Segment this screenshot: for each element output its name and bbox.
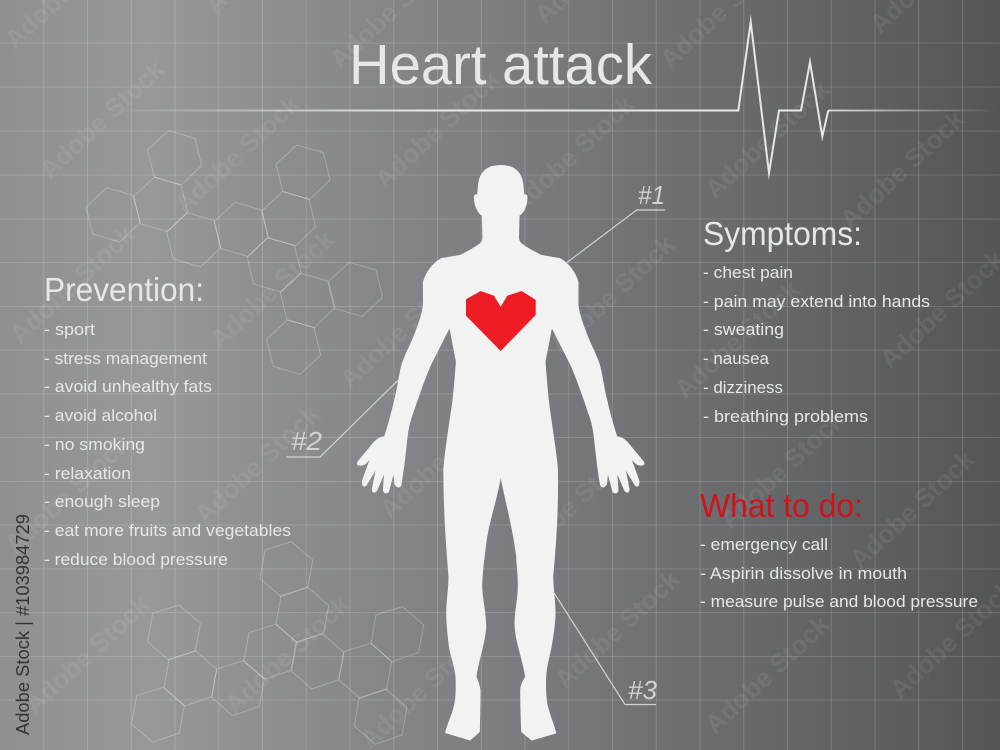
symptoms list: - chest pain [703,263,793,282]
stock watermark layer: Adobe Stock [204,224,341,354]
what to do heading: What to do: [700,487,863,524]
stock watermark layer: Adobe Stock [4,219,141,349]
red heart [466,291,536,351]
prevention list: - sport [44,320,95,339]
stock watermark layer: Adobe Stock [549,564,686,694]
ECG heartbeat line [100,22,995,173]
side stock credit: Adobe Stock | #103984729 [13,514,33,735]
stock watermark layer: Adobe Stock [369,64,506,194]
panel: symptoms [703,215,930,426]
stock watermark layer: Adobe Stock [169,89,306,219]
what to do list: - measure pulse and blood pressure [700,592,978,611]
stock watermark layer: Adobe Stock [669,274,806,404]
stock watermark layer: Adobe Stock [189,399,326,529]
symptoms heading: Symptoms: [703,215,862,252]
body silhouette with heart [357,166,644,740]
stock watermark layer: Adobe Stock [374,394,511,524]
prevention heading: Prevention: [44,271,204,308]
callout #1: #1 [638,180,665,210]
callout #3 [553,592,658,705]
stock watermark layer: Adobe Stock [504,439,641,569]
stock watermark layer: Adobe Stock [714,404,851,534]
panel: prevention [44,271,291,569]
stock watermark layer: Adobe Stock [699,74,836,204]
symptoms list: - breathing problems [703,407,868,426]
panel: what to do [700,487,978,611]
stock watermark layer: Adobe Stock [334,264,471,394]
hexagon pattern: lower left [132,542,424,744]
stock watermark layer: Adobe Stock [0,429,136,559]
prevention list: - stress management [44,349,207,368]
prevention list: - relaxation [44,464,131,483]
symptoms list [703,263,930,426]
symptoms list: - nausea [703,349,770,368]
symptoms list: - sweating [703,320,784,339]
stock watermark layer: Adobe Stock [34,54,171,184]
stock watermark layer: Adobe Stock [834,104,971,234]
prevention list: - reduce blood pressure [44,550,228,569]
stock watermark layer: Adobe Stock [504,89,641,219]
callout #2: #2 [291,426,323,456]
prevention list [44,320,291,569]
stock watermark layer: Adobe Stock [844,444,981,574]
symptoms list: - dizziness [703,378,783,397]
prevention list: - avoid unhealthy fats [44,377,212,396]
what to do list: - Aspirin dissolve in mouth [700,564,907,583]
prevention list: - no smoking [44,435,145,454]
prevention list: - enough sleep [44,492,160,511]
hexagon pattern: upper left [86,131,383,374]
symptoms list: - pain may extend into hands [703,292,930,311]
human body [357,166,644,740]
stock watermark layer: Adobe Stock [19,589,156,719]
title: Heart attack [349,33,652,97]
stock watermark layer: Adobe Stock [219,589,356,719]
what to do list: - emergency call [700,535,828,554]
callout #2 [286,380,398,457]
callout #3: #3 [628,675,658,705]
what to do list [700,535,978,611]
stock watermark layer: Adobe Stock [699,609,836,739]
stock watermark layer: Adobe Stock [544,229,681,359]
callout #1 [567,180,665,263]
prevention list: - avoid alcohol [44,406,157,425]
prevention list: - eat more fruits and vegetables [44,521,291,540]
